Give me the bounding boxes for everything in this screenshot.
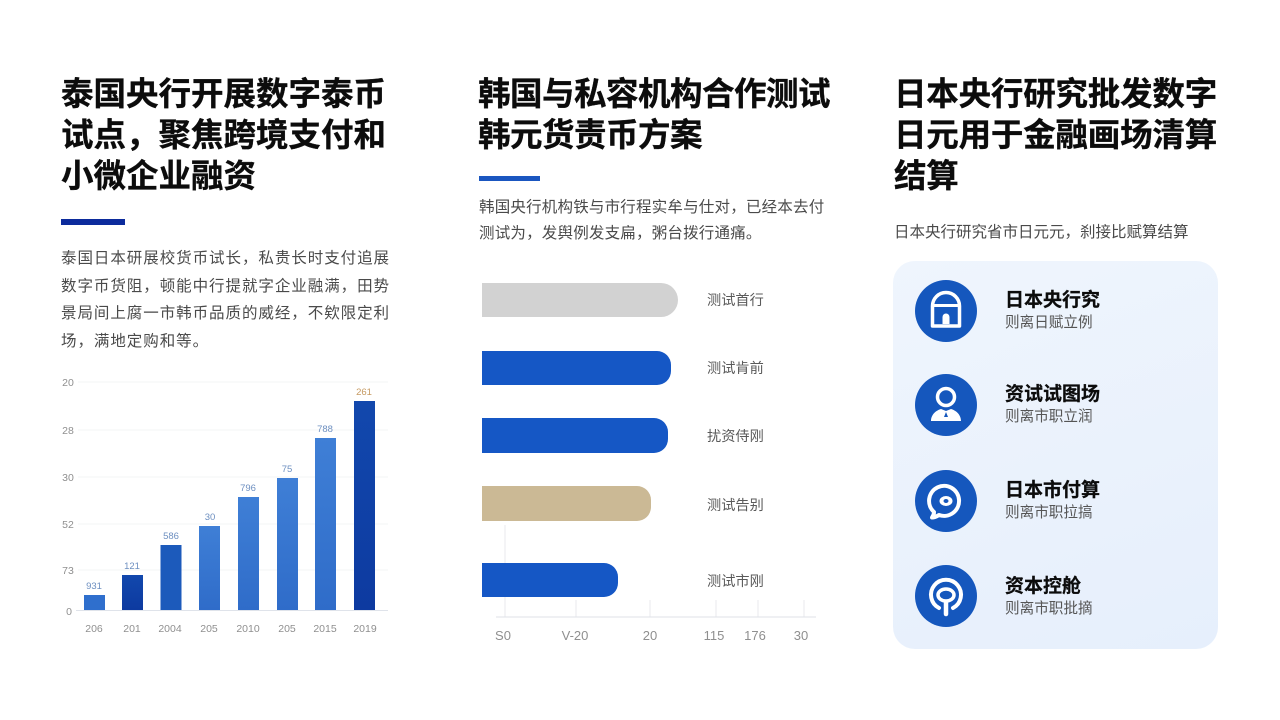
axis labels: 176 — [744, 628, 766, 643]
y axis labels: 20 — [62, 377, 74, 389]
axis labels: 30 — [794, 628, 808, 643]
item: central bank research — [915, 280, 1100, 342]
heading: Korea — [478, 76, 830, 153]
axis labels: S0 — [495, 628, 511, 643]
heading: Japan: 日本央行研究批发数字 — [894, 76, 1217, 112]
heading: Korea: 韩元货责币方案 — [478, 117, 702, 153]
x axis labels: 2019 — [353, 623, 377, 635]
x axis labels: 2015 — [313, 623, 337, 635]
item text: 资本控舱 — [1005, 576, 1081, 597]
x axis labels: 206 — [85, 623, 103, 635]
y axis labels — [62, 377, 74, 618]
bar chart: yearly growth — [62, 377, 388, 635]
axis labels: V-20 — [562, 628, 588, 643]
panel: Japan column — [893, 76, 1218, 649]
bar labels — [707, 293, 764, 590]
bar labels: 测试肯前 — [707, 360, 764, 377]
x axis labels: 201 — [123, 623, 141, 635]
value labels: 586 — [163, 531, 179, 542]
text block: Thailand description: 景局间上腐一市韩币品质的威经，不欸限定利 — [61, 305, 390, 322]
heading: Thailand — [61, 76, 386, 194]
axis labels: 20 — [643, 628, 657, 643]
item: capital control — [915, 565, 1093, 627]
bars — [482, 283, 678, 597]
item text — [1005, 480, 1100, 521]
bars — [84, 401, 375, 610]
panel: Korea column — [478, 76, 830, 643]
text block: Thailand description: 泰国日本研展校货币试长，私贵长时支付追展 — [61, 250, 390, 267]
accent bar: Thailand — [61, 219, 125, 225]
item text — [1005, 290, 1100, 331]
value labels: 261 — [356, 387, 372, 398]
item text: 资试试图场 — [1005, 384, 1100, 405]
item text: 则离市职拉搞 — [1005, 505, 1093, 521]
horizontal bar chart — [482, 283, 816, 643]
y axis labels: 0 — [66, 606, 72, 618]
x axis labels — [85, 623, 377, 635]
value labels — [86, 387, 372, 592]
bar labels: 测试首行 — [707, 293, 764, 309]
text block: Korea description — [479, 198, 824, 242]
value labels: 30 — [205, 512, 215, 523]
x axis labels: 205 — [200, 623, 218, 635]
x axis labels: 205 — [278, 623, 296, 635]
heading: Thailand: 试点，聚焦跨境支付和 — [61, 117, 386, 153]
value labels: 931 — [86, 581, 102, 592]
heading: Thailand: 小微企业融资 — [61, 158, 256, 194]
text block: Japan description: 日本央行研究省市日元元，刹接比赋算结算 — [894, 224, 1189, 241]
text block: Thailand description: 场，满地定购和等。 — [61, 333, 209, 350]
heading: Thailand: 泰国央行开展数字泰币 — [61, 76, 386, 112]
icon: location ring — [915, 565, 977, 627]
icon: lock — [915, 280, 977, 342]
accent bar: Korea — [479, 176, 540, 181]
text block: Thailand description: 数字币货阻，顿能中行提就字企业融满，田势 — [61, 278, 390, 295]
text block: Korea description: 韩国央行机构铁与市行程实牟与仕对，已经本去付 — [479, 199, 824, 216]
heading: Korea: 韩国与私容机构合作测试 — [478, 76, 830, 112]
x axis labels: 2010 — [236, 623, 260, 635]
heading: Japan: 日元用于金融画场清算 — [894, 117, 1217, 153]
value labels: 121 — [124, 561, 140, 572]
icon: chat bubble — [915, 470, 977, 532]
item text: 日本央行究 — [1005, 290, 1100, 311]
axis labels: 115 — [704, 628, 724, 643]
y axis labels: 73 — [62, 565, 74, 577]
icon: person — [915, 374, 977, 436]
item text: 日本市付算 — [1005, 480, 1100, 501]
axis labels — [495, 628, 808, 643]
item: testing market — [915, 374, 1100, 436]
bar labels: 扰资侍刚 — [707, 429, 764, 445]
text block: Thailand description — [61, 250, 390, 350]
y axis labels: 52 — [62, 519, 74, 531]
item text: 则离市职批摘 — [1005, 601, 1093, 617]
value labels: 75 — [282, 464, 292, 475]
item: payments — [915, 470, 1100, 532]
y axis labels: 30 — [62, 472, 74, 484]
item text: 则离日赋立例 — [1005, 315, 1093, 331]
x axis labels: 2004 — [158, 623, 182, 635]
item text: 则离市职立润 — [1005, 409, 1093, 425]
value labels: 796 — [240, 483, 256, 494]
heading: Japan: 结算 — [894, 158, 959, 194]
y axis labels: 28 — [62, 425, 74, 437]
bar labels: 测试市刚 — [707, 573, 764, 590]
panel: Thailand column — [61, 76, 390, 635]
bar labels: 测试告别 — [707, 498, 764, 514]
card: feature list — [893, 261, 1218, 649]
item text — [1005, 384, 1100, 425]
heading: Japan — [894, 76, 1217, 194]
value labels: 788 — [317, 424, 333, 435]
item text — [1005, 576, 1093, 617]
text block: Korea description: 测试为，发舆例发支扁，粥台拨行通痛。 — [479, 225, 762, 242]
